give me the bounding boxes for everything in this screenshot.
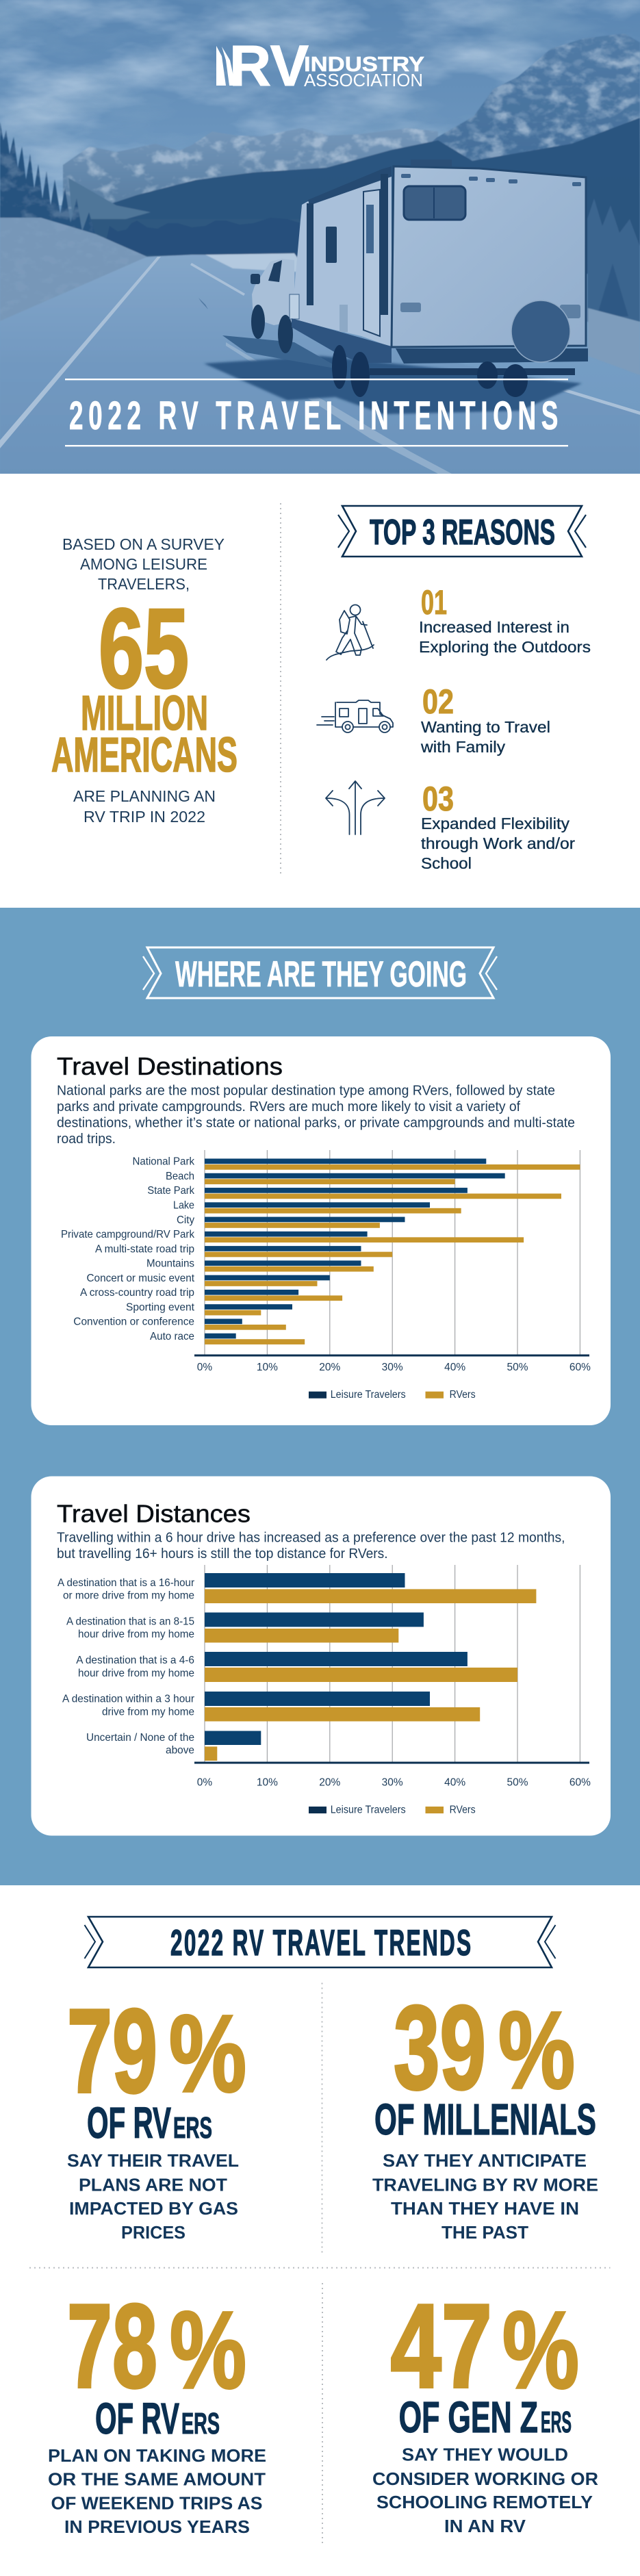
stat: 78% of RVers: PLAN ON TAKING MORE: [48, 2445, 266, 2466]
panel: travel distances: [31, 1476, 611, 1836]
reason 03: [326, 780, 575, 872]
bar chart: distances: 10%: [257, 1777, 278, 1788]
stat: 79% of RVers: [67, 1984, 246, 2243]
big stat: 65 million Americans: [51, 585, 238, 782]
bar chart: destinations: State Park: [147, 1185, 195, 1197]
stat: 78% of RVers: OF WEEKEND TRIPS AS: [51, 2493, 262, 2514]
bar chart: destinations: 60%: [569, 1362, 591, 1373]
stat: 47% of Gen Zers: SAY THEY WOULD: [402, 2444, 568, 2464]
stat: 79% of RVers: %: [169, 1992, 246, 2115]
reason 01: Increased Interest in: [419, 618, 569, 636]
bar chart: destinations: Convention or conference: [73, 1316, 194, 1328]
bar chart: destinations: A cross-country road trip: [80, 1287, 194, 1299]
reason 03: 03: [422, 780, 454, 818]
icon: motorhome: [317, 700, 393, 732]
bar chart: distances: A destination that is a 16-hour: [57, 1577, 195, 1589]
bar chart: distances: above: [166, 1744, 194, 1757]
stat: 79% of RVers: IMPACTED BY GAS: [69, 2198, 238, 2219]
logo: RV Industry Association: [216, 34, 424, 98]
stat: 39% of millenials: %: [498, 1989, 575, 2111]
description: travel destinations: National parks are the most popular destination type among RVers, followed by state: [57, 1083, 555, 1098]
logo: RV Industry Association: ASSOCIATION: [304, 70, 423, 90]
survey intro text: BASED ON A SURVEY: [62, 535, 225, 553]
reason 03: School: [421, 854, 472, 872]
description: travel distances: but travelling 16+ hours is still the top distance for RVers.: [57, 1546, 388, 1561]
survey closing text: RV TRIP IN 2022: [84, 808, 205, 826]
stat: 39% of millenials: 39: [394, 1980, 486, 2114]
description: travel destinations: [57, 1083, 575, 1147]
stat: 78% of RVers: %: [170, 2288, 246, 2411]
stat: 79% of RVers: PRICES: [121, 2222, 185, 2243]
bar chart: destinations: Sporting event: [126, 1301, 195, 1313]
bar chart: destinations: Beach: [166, 1171, 194, 1182]
bar chart: destinations: Lake: [173, 1199, 194, 1212]
stat: 78% of RVers: IN PREVIOUS YEARS: [64, 2516, 250, 2537]
survey intro text: AMONG LEISURE: [80, 555, 207, 573]
bar chart: distances: 50%: [507, 1777, 528, 1788]
survey closing text: [73, 787, 216, 826]
bar chart: destinations: Mountains: [146, 1258, 194, 1270]
stat: 47% of Gen Zers: IN AN RV: [444, 2516, 526, 2536]
description: travel destinations: parks and private campgrounds. RVers are much more likely to visit a variety of: [57, 1099, 520, 1114]
heading: where are they going: WHERE ARE THEY GOING: [175, 954, 467, 995]
bar chart: distances: 20%: [319, 1777, 341, 1788]
bar chart: destinations: Concert or music event: [86, 1273, 195, 1284]
bar chart: distances: hour drive from my home: [78, 1668, 194, 1679]
stat: 47% of Gen Zers: CONSIDER WORKING OR: [372, 2469, 598, 2489]
bar chart: distances: Uncertain / None of the: [86, 1732, 194, 1744]
big stat: 65 million Americans: 65: [99, 585, 189, 711]
stat: 78% of RVers: OF RV: [95, 2394, 179, 2443]
reason 02: [317, 683, 550, 756]
heading: travel destinations: Travel Destinations: [57, 1052, 283, 1080]
description: travel distances: Travelling within a 6 hour drive has increased as a preference over the past 12 months,: [57, 1529, 565, 1546]
stat: 79% of RVers: PLANS ARE NOT: [79, 2174, 227, 2195]
legend: destinations: RVers: [450, 1389, 476, 1401]
legend: destinations: Leisure Travelers: [331, 1389, 406, 1401]
panel: where are they going: [0, 908, 640, 1885]
description: travel distances: [57, 1529, 565, 1561]
logo: RV Industry Association: INDUSTRY: [304, 53, 424, 76]
legend: destinations: [309, 1389, 476, 1401]
bar chart: destinations: 50%: [507, 1362, 528, 1373]
reason 01: Exploring the Outdoors: [419, 638, 591, 656]
bar chart: distances: [57, 1565, 591, 1788]
bar chart: distances: 30%: [382, 1777, 403, 1788]
stat: 39% of millenials: [372, 1980, 598, 2243]
reason 02: with Family: [420, 738, 506, 756]
stat: 78% of RVers: 78: [67, 2279, 157, 2412]
stat: 39% of millenials: THE PAST: [441, 2222, 528, 2243]
reason 03: through Work and/or: [421, 834, 575, 852]
legend: distances: Leisure Travelers: [331, 1805, 406, 1816]
stat: 78% of RVers: [48, 2279, 266, 2537]
bar chart: destinations: 40%: [444, 1362, 465, 1373]
trailer side: [292, 167, 392, 347]
survey intro text: TRAVELERS,: [98, 575, 190, 593]
bar chart: destinations: 20%: [319, 1362, 341, 1373]
bar chart: distances: 40%: [444, 1777, 465, 1788]
big stat: 65 million Americans: AMERICANS: [51, 728, 238, 782]
bar chart: destinations: National Park: [133, 1156, 195, 1168]
icon: diverging arrows: [326, 781, 385, 834]
bar chart: distances: drive from my home: [102, 1706, 194, 1718]
bar chart: distances: A destination that is an 8-15: [66, 1616, 194, 1628]
panel: travel destinations: [31, 1036, 611, 1425]
heading: travel distances: Travel Distances: [57, 1499, 251, 1527]
bar chart: destinations: A multi-state road trip: [95, 1243, 194, 1255]
stat: 39% of millenials: THAN THEY HAVE IN: [391, 2198, 579, 2219]
reason 03: Expanded Flexibility: [421, 815, 570, 832]
bar chart: destinations: 10%: [257, 1362, 278, 1373]
stat: 39% of millenials: TRAVELING BY RV MORE: [372, 2174, 598, 2195]
stat: 39% of millenials: SAY THEY ANTICIPATE: [383, 2150, 587, 2171]
bar chart: distances: 0%: [197, 1777, 212, 1788]
hero photo: RV on mountain road: [0, 0, 640, 474]
stat: 79% of RVers: OF RV: [87, 2098, 171, 2147]
reason 02: 02: [422, 683, 454, 721]
bar chart: destinations: 0%: [197, 1362, 212, 1373]
stat: 47% of Gen Zers: OF GEN Z: [399, 2393, 538, 2442]
bar chart: destinations: 30%: [382, 1362, 403, 1373]
bar chart: destinations: [61, 1150, 591, 1373]
bar chart: distances: A destination that is a 4-6: [76, 1655, 194, 1666]
stat: 47% of Gen Zers: SCHOOLING REMOTELY: [376, 2492, 593, 2512]
stat: 47% of Gen Zers: ERS: [541, 2406, 572, 2439]
stat: 47% of Gen Zers: 47: [390, 2279, 492, 2412]
bar chart: destinations: City: [177, 1214, 194, 1226]
reason 01: 01: [421, 583, 447, 622]
stat: 47% of Gen Zers: %: [502, 2288, 579, 2411]
logo: RV Industry Association: RV: [229, 34, 309, 98]
stat: 78% of RVers: OR THE SAME AMOUNT: [48, 2469, 266, 2489]
truck: [251, 259, 294, 353]
panel: survey headline: [51, 535, 238, 826]
stat: 79% of RVers: SAY THEIR TRAVEL: [67, 2150, 239, 2171]
stat: 47% of Gen Zers: [372, 2279, 598, 2536]
bar chart: distances: or more drive from my home: [63, 1590, 194, 1602]
stat: 79% of RVers: ERS: [173, 2111, 212, 2145]
survey closing text: ARE PLANNING AN: [73, 787, 216, 805]
big stat: 65 million Americans: MILLION: [81, 687, 208, 741]
heading: top 3 reasons: [338, 506, 586, 557]
legend: distances: [309, 1805, 476, 1816]
stat: 78% of RVers: ERS: [181, 2407, 220, 2440]
description: travel destinations: destinations, whether it’s state or national parks, or private campgrounds and multi-state: [57, 1114, 575, 1131]
survey intro text: [62, 535, 225, 593]
stat: 79% of RVers: 79: [67, 1984, 157, 2117]
icon: hiker: [327, 605, 374, 660]
bar chart: distances: hour drive from my home: [78, 1629, 194, 1640]
bar chart: destinations: Private campground/RV Park: [61, 1229, 195, 1240]
reason 01: [327, 583, 591, 660]
heading: where are they going: [143, 947, 497, 998]
bar chart: destinations: Auto race: [150, 1331, 194, 1342]
reason 02: Wanting to Travel: [421, 718, 550, 736]
description: travel destinations: road trips.: [57, 1131, 116, 1147]
legend: distances: RVers: [450, 1805, 476, 1816]
trailer rear: [392, 166, 586, 347]
bar chart: distances: 60%: [569, 1777, 591, 1788]
bar chart: distances: A destination within a 3 hour: [62, 1694, 195, 1705]
heading: 2022 RV travel trends: [85, 1917, 556, 1967]
